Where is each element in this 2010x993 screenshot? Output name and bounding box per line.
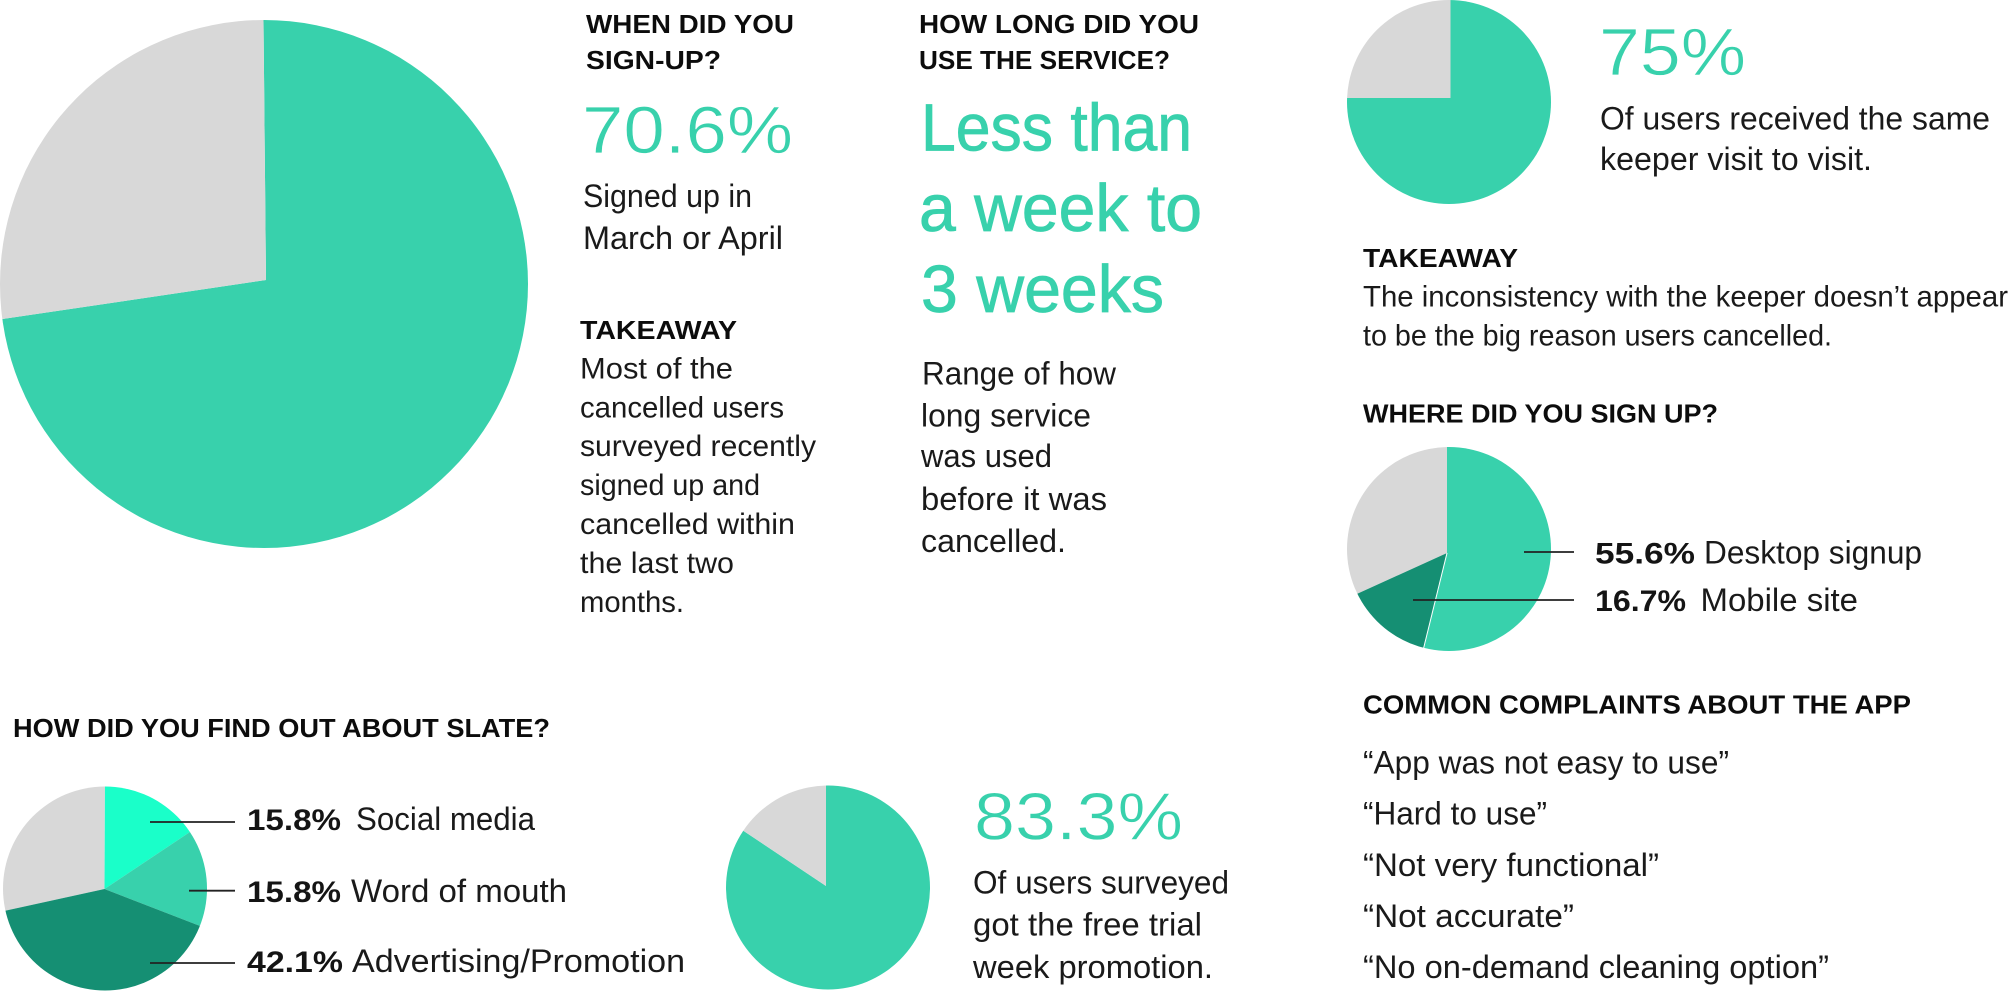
caption: range: was used xyxy=(920,438,1052,474)
list: complaints: “App was not easy to use” xyxy=(1363,744,1729,780)
stat caption: Of users surveyed xyxy=(973,864,1229,900)
heading: when did you sign up: SIGN-UP? xyxy=(586,45,721,75)
takeaway text xyxy=(580,352,816,619)
caption: range xyxy=(920,356,1117,559)
legend: discovery channel: Word of mouth xyxy=(351,873,567,909)
panel: keeper stat xyxy=(1363,15,2008,352)
heading: how long: USE THE SERVICE? xyxy=(919,45,1170,75)
pie chart: discovery channel xyxy=(3,786,207,990)
heading: when did you sign up xyxy=(586,9,794,75)
caption: range: cancelled. xyxy=(921,523,1066,559)
caption: range: long service xyxy=(921,398,1091,434)
panel: when did you sign up xyxy=(580,9,816,619)
takeaway text: surveyed recently xyxy=(580,430,816,463)
legend: discovery channel: 15.8% xyxy=(247,804,341,837)
caption: range: before it was xyxy=(921,481,1107,517)
pie chart: sign-up channel xyxy=(1347,447,1551,651)
stat caption: Signed up in xyxy=(583,178,752,214)
stat caption: March or April xyxy=(583,220,783,256)
legend: sign-up channel: 16.7% xyxy=(1595,585,1686,618)
legend: discovery channel: Social media xyxy=(356,801,535,837)
heading: how long: HOW LONG DID YOU xyxy=(919,9,1199,39)
takeaway heading: TAKEAWAY xyxy=(1363,243,1518,273)
takeaway text: months. xyxy=(580,586,684,619)
heading: common complaints: COMMON COMPLAINTS ABOUT THE APP xyxy=(1363,690,1911,720)
takeaway text: signed up and xyxy=(580,469,760,502)
takeaway text: Most of the xyxy=(580,352,733,386)
stat: less than a week to 3 weeks xyxy=(919,90,1202,327)
takeaway text: the last two xyxy=(580,547,734,580)
takeaway heading: TAKEAWAY xyxy=(580,315,737,345)
heading: how did you find out about slate: HOW DID YOU FIND OUT ABOUT SLATE? xyxy=(13,713,550,743)
list: complaints xyxy=(1363,744,1829,985)
takeaway text xyxy=(1363,280,2008,352)
legend: sign-up channel xyxy=(1413,534,1922,618)
list: complaints: “Not accurate” xyxy=(1363,898,1574,934)
legend: discovery channel xyxy=(150,801,685,979)
legend: sign-up channel: Mobile site xyxy=(1700,582,1858,618)
stat: 70.6%: 70.6% xyxy=(582,93,793,168)
takeaway text: to be the big reason users cancelled. xyxy=(1363,320,1832,352)
stat: less than a week to 3 weeks: 3 weeks xyxy=(921,252,1164,327)
takeaway text: cancelled within xyxy=(580,508,795,541)
takeaway text: cancelled users xyxy=(580,392,784,424)
panel: how long did you use the service xyxy=(919,9,1202,559)
pie chart: free trial 83.3% xyxy=(726,786,930,990)
list: complaints: “Hard to use” xyxy=(1363,796,1547,832)
heading: when did you sign up: WHEN DID YOU xyxy=(586,9,794,39)
heading: how long xyxy=(919,9,1199,75)
stat: less than a week to 3 weeks: Less than xyxy=(921,90,1192,166)
panel: free trial stat xyxy=(972,780,1229,985)
stat: less than a week to 3 weeks: a week to xyxy=(919,171,1202,246)
legend: sign-up channel: 55.6% xyxy=(1595,538,1695,570)
legend: discovery channel: Advertising/Promotion xyxy=(352,943,685,979)
stat caption: keeper visit to visit. xyxy=(1600,141,1872,177)
heading: where did you sign up: WHERE DID YOU SIGN UP? xyxy=(1363,398,1718,428)
stat caption xyxy=(972,864,1229,985)
stat: 83.3%: 83.3% xyxy=(974,780,1183,854)
legend: discovery channel: 15.8% xyxy=(247,876,341,909)
list: complaints: “Not very functional” xyxy=(1363,847,1659,883)
legend: sign-up channel: Desktop signup xyxy=(1704,534,1922,570)
takeaway text: The inconsistency with the keeper doesn’t appear xyxy=(1363,280,2008,314)
caption: range: Range of how xyxy=(922,356,1117,392)
stat: 75%: 75% xyxy=(1599,15,1746,90)
legend: discovery channel: 42.1% xyxy=(247,946,343,979)
stat caption: Of users received the same xyxy=(1600,100,1990,136)
list: complaints: “No on-demand cleaning option” xyxy=(1363,949,1829,985)
stat caption xyxy=(1600,100,1990,177)
pie chart: sign-up timing 70.6% xyxy=(0,20,528,548)
stat caption: got the free trial xyxy=(973,906,1202,942)
stat caption: week promotion. xyxy=(972,949,1213,985)
pie chart: same keeper 75% xyxy=(1347,0,1551,204)
stat caption xyxy=(583,178,783,256)
